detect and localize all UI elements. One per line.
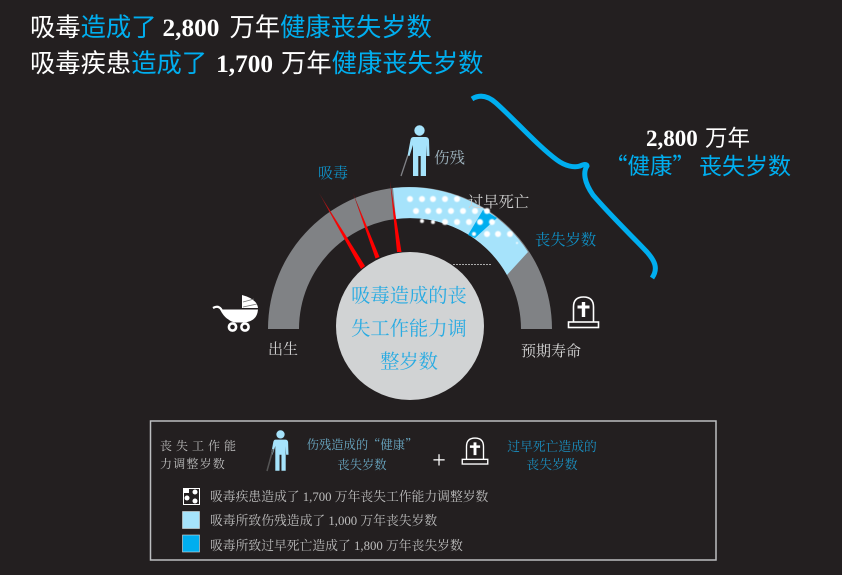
- red pointer lines: [319, 181, 402, 269]
- legend: definition heading: 丧失工作能: [160, 438, 240, 453]
- legend: disability text: 伤残造成的“健康”: [307, 435, 417, 453]
- centre circle: [336, 252, 484, 400]
- legend row: dotted swatch: 吸毒疾患造成了 1,700 万年丧失工作能力调整岁数: [210, 489, 489, 504]
- centre circle: 整岁数: [380, 351, 438, 373]
- icon: gravestone: [568, 297, 598, 328]
- icon: person with cane: [401, 125, 430, 176]
- title line 2: 吸毒疾患造成了 1,700 万年健康丧失岁数: [30, 44, 483, 80]
- callout: 2,800 万年 健康丧失岁数: 2,800: [646, 126, 698, 151]
- icon: baby stroller: [213, 295, 258, 331]
- label: 伤残: 伤残: [434, 149, 466, 167]
- legend: disability text: 丧失岁数: [337, 455, 387, 473]
- dotted leader: [453, 264, 491, 266]
- callout: 2,800 万年 健康丧失岁数: “健康”: [605, 149, 695, 181]
- legend: definition heading: 力调整岁数: [160, 456, 226, 471]
- centre circle text: 吸毒造成的丧: [351, 285, 467, 307]
- legend row: light blue swatch: 吸毒所致伤残造成了 1,000 万年丧失岁数: [210, 513, 437, 528]
- callout: 2,800 万年 健康丧失岁数: 丧失岁数: [699, 147, 791, 181]
- brace: [472, 96, 655, 278]
- gauge: grey life arc: [268, 187, 552, 329]
- label: 丧失岁数: 丧失岁数: [535, 231, 596, 249]
- label: 预期寿命: 预期寿命: [521, 343, 581, 360]
- legend: premature death text: [507, 439, 597, 472]
- label: 出生: 出生: [268, 341, 298, 358]
- legend: premature death text: 过早死亡造成的: [507, 439, 597, 454]
- legend: person icon: [267, 430, 288, 471]
- semicircle gauge: [268, 187, 552, 329]
- legend: disability text: [307, 435, 417, 473]
- label: 过早死亡: 过早死亡: [468, 194, 529, 211]
- label: 吸毒: 吸毒: [318, 165, 348, 182]
- callout: 2,800 万年 健康丧失岁数: 万年: [705, 121, 750, 153]
- legend: definition heading: [160, 438, 240, 471]
- legend panel: [150, 421, 716, 560]
- legend: premature death text: 丧失岁数: [526, 457, 578, 472]
- centre circle: 失工作能力调: [351, 318, 467, 340]
- gauge: white dots: [407, 196, 518, 244]
- title line 1: 吸毒造成了2,800 万年健康丧失岁数: [30, 8, 432, 44]
- callout: 2,800 万年 健康丧失岁数: [605, 121, 791, 181]
- legend: plus sign: +: [432, 448, 446, 474]
- legend row: dark blue swatch: 吸毒所致过早死亡造成了 1,800 万年丧失岁数: [210, 538, 463, 553]
- gauge: dark blue premature death segment: [468, 210, 497, 238]
- gauge: light blue disability segment: [393, 187, 528, 275]
- legend: grave icon: [462, 438, 488, 464]
